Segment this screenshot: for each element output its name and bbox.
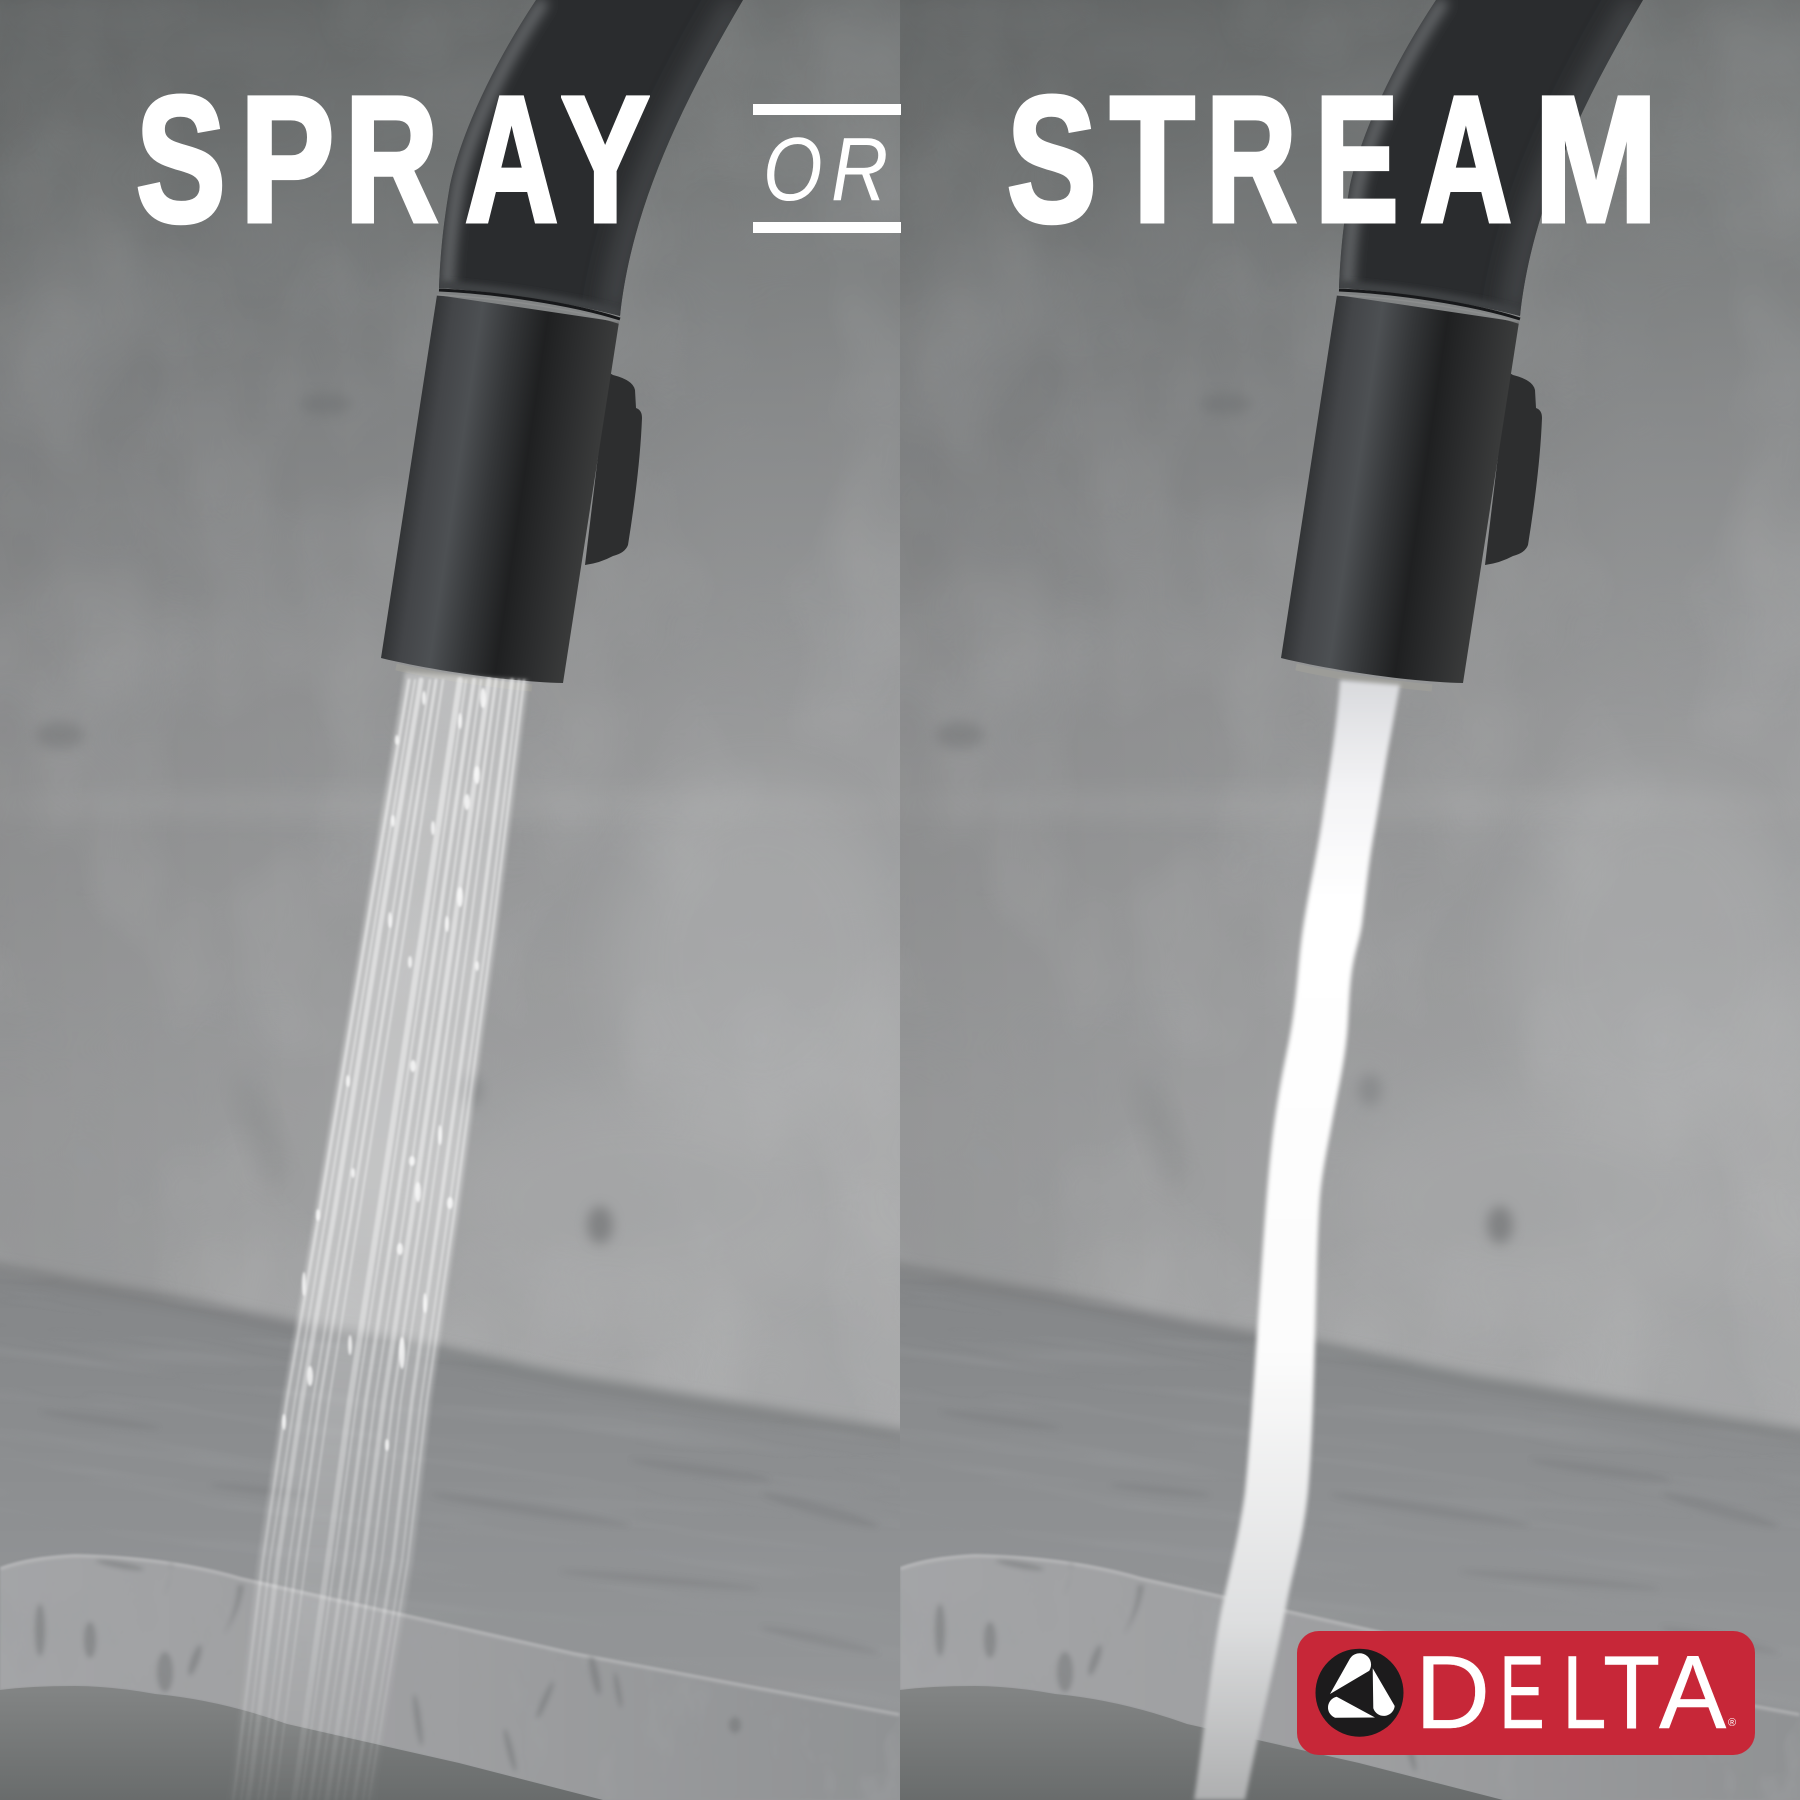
- title: STREAM: E: [1315, 59, 1398, 259]
- logo emblem circle: [1316, 1649, 1404, 1737]
- title: STREAM: R: [1206, 59, 1296, 259]
- Delta wordmark: ®: [1728, 1717, 1736, 1729]
- water: solid stream: [1194, 680, 1400, 1800]
- title: OR with rules above and below: O: [763, 120, 823, 220]
- title: SPRAY: A: [465, 59, 558, 259]
- marble wall background: [0, 0, 910, 1800]
- title: SPRAY: Y: [561, 59, 649, 259]
- Delta wordmark: L: [1562, 1635, 1607, 1751]
- faucet arm: [439, 0, 743, 316]
- Delta wordmark: D: [1415, 1635, 1490, 1751]
- title: SPRAY: [136, 59, 650, 259]
- title: OR with rules above and below: R: [831, 120, 888, 220]
- marble countertop: [0, 1250, 960, 1800]
- nozzle face: [396, 667, 532, 688]
- title: STREAM: S: [1006, 59, 1096, 259]
- Delta wordmark: A: [1659, 1635, 1726, 1751]
- title: SPRAY: S: [136, 59, 225, 259]
- Delta wordmark: T: [1603, 1635, 1660, 1751]
- title: SPRAY: R: [345, 59, 438, 259]
- faucet spray button: [585, 372, 642, 565]
- title: STREAM: M: [1534, 59, 1657, 259]
- title: STREAM: T: [1110, 59, 1195, 259]
- countertop front edge: [0, 1540, 900, 1800]
- water: aerated spray: [228, 672, 528, 1800]
- Delta wordmark: E: [1499, 1635, 1545, 1751]
- Delta logo badge: [1297, 1631, 1755, 1755]
- title: OR with rules above and below: [753, 104, 901, 233]
- title: STREAM: A: [1420, 59, 1512, 259]
- title: SPRAY: P: [240, 59, 334, 259]
- faucet pull-down head: [381, 290, 620, 683]
- basin below the counter edge: [0, 1686, 603, 1800]
- logo emblem petals: [1328, 1653, 1395, 1718]
- countertop veining: [782, 1499, 1760, 1636]
- right panel: same faucet scene: [768, 0, 1800, 1800]
- title: STREAM: [1006, 59, 1657, 259]
